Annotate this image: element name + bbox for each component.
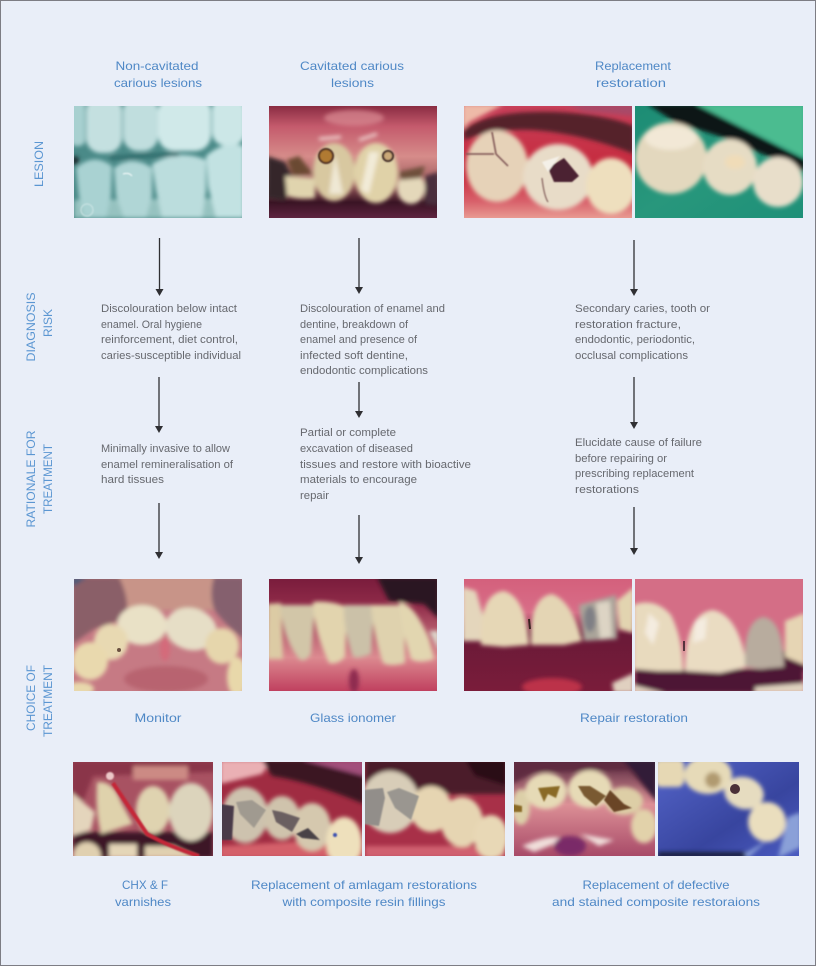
caption: monitor: Monitor: [134, 711, 182, 725]
text: diagnosis column 3: occlusal complications: [575, 350, 689, 362]
column heading: cavitated carious lesions: lesions: [331, 76, 374, 90]
arrows: column 3: [630, 240, 638, 555]
text: diagnosis column 3: Secondary caries, tooth or: [575, 303, 710, 315]
row label: choice of treatment: TREATMENT: [41, 664, 55, 737]
text: diagnosis column 3: endodontic, periodontic,: [575, 334, 695, 346]
row label: rationale for treatment: [24, 430, 55, 528]
text: diagnosis column 1: reinforcement, diet control,: [101, 334, 238, 346]
column heading: replacement restoration: Replacement: [595, 59, 672, 73]
column heading: replacement restoration: restoration: [596, 76, 666, 90]
text: diagnosis column 1: Discolouration below intact: [101, 303, 237, 315]
caption: chx and f varnishes: varnishes: [115, 895, 171, 909]
photo: monitored upper arch: [74, 579, 242, 691]
text: rationale column 1: hard tissues: [101, 474, 165, 486]
caption: replacement of amalgam restorations: [251, 878, 477, 909]
text: diagnosis column 1: caries-susceptible individual: [101, 350, 241, 362]
row label: rationale for treatment: RATIONALE FOR: [24, 430, 38, 528]
text: rationale column 3: restorations: [575, 484, 640, 496]
text: rationale column 3: before repairing or: [575, 453, 667, 465]
text: diagnosis column 2: [300, 303, 445, 377]
column heading: non-cavitated carious lesions: [114, 59, 202, 90]
photo: tooth after repair: [635, 579, 803, 691]
text: diagnosis column 1: enamel. Oral hygiene: [101, 319, 202, 331]
row label: lesion: LESION: [32, 141, 46, 187]
photo: amalgam restorations before: [222, 762, 362, 856]
caption: replacement of defective composite: Replacement of defective: [582, 878, 730, 892]
row label: diagnosis risk: DIAGNOSIS: [24, 292, 38, 362]
caption: replacement of amalgam restorations: with composite resin fillings: [281, 895, 446, 909]
photo: stained composite restorations before: [514, 762, 655, 856]
arrows: column 1: [155, 238, 164, 559]
text: diagnosis column 2: endodontic complications: [300, 365, 429, 377]
row label: choice of treatment: [24, 664, 55, 737]
text: rationale column 2: [300, 427, 471, 502]
text: diagnosis column 2: enamel and presence of: [300, 334, 418, 346]
photo: stained composite restorations on blue dam: [658, 762, 799, 856]
row label: choice of treatment: CHOICE OF: [24, 665, 38, 731]
column heading: cavitated carious lesions: [300, 59, 404, 90]
caption: glass ionomer: Glass ionomer: [310, 711, 396, 725]
row label: diagnosis risk: [24, 292, 55, 362]
text: rationale column 1: Minimally invasive to allow: [101, 443, 230, 455]
photo: restored molars on green dam: [635, 106, 803, 218]
text: rationale column 3: [575, 437, 702, 496]
text: rationale column 3: Elucidate cause of failure: [575, 437, 702, 449]
text: diagnosis column 2: dentine, breakdown of: [300, 319, 409, 331]
photo: varnish application: [73, 762, 213, 856]
row label: rationale for treatment: TREATMENT: [41, 443, 55, 514]
text: rationale column 2: materials to encourage: [300, 474, 417, 486]
text: rationale column 3: prescribing replacement: [575, 468, 694, 480]
photo: tooth before repair: [464, 579, 632, 691]
photo: composite fillings after: [365, 762, 505, 856]
caption: replacement of defective composite: [552, 878, 760, 909]
photo: glass ionomer lower incisors: [269, 579, 437, 691]
text: rationale column 2: Partial or complete: [300, 427, 396, 439]
photo: failed restoration molar: [464, 106, 632, 218]
caption: chx and f varnishes: [115, 878, 171, 909]
photo: bitewing x-ray: [74, 106, 242, 218]
text: diagnosis column 3: [575, 303, 710, 362]
photo: cavitated incisors: [269, 106, 437, 218]
text: diagnosis column 3: restoration fracture,: [575, 319, 681, 331]
column heading: non-cavitated carious lesions: carious lesions: [114, 76, 202, 90]
caption: replacement of amalgam restorations: Replacement of amlagam restorations: [251, 878, 477, 892]
text: rationale column 2: excavation of diseased: [300, 443, 413, 455]
column heading: non-cavitated carious lesions: Non-cavitated: [116, 59, 198, 73]
text: diagnosis column 2: Discolouration of enamel and: [300, 303, 445, 315]
text: diagnosis column 2: infected soft dentine,: [300, 350, 408, 362]
arrows: column 2: [355, 238, 363, 564]
caption: repair restoration: Repair restoration: [580, 711, 688, 725]
text: rationale column 1: [101, 443, 234, 486]
text: diagnosis column 1: [101, 303, 241, 362]
text: rationale column 1: enamel remineralisation of: [101, 459, 234, 471]
caption: replacement of defective composite: and stained composite restoraions: [552, 895, 760, 909]
caption: chx and f varnishes: CHX & F: [122, 878, 168, 892]
column heading: cavitated carious lesions: Cavitated carious: [300, 59, 404, 73]
text: rationale column 2: repair: [300, 490, 329, 502]
row label: diagnosis risk: RISK: [41, 309, 55, 337]
column heading: replacement restoration: [595, 59, 672, 90]
text: rationale column 2: tissues and restore with bioactive: [300, 459, 471, 471]
